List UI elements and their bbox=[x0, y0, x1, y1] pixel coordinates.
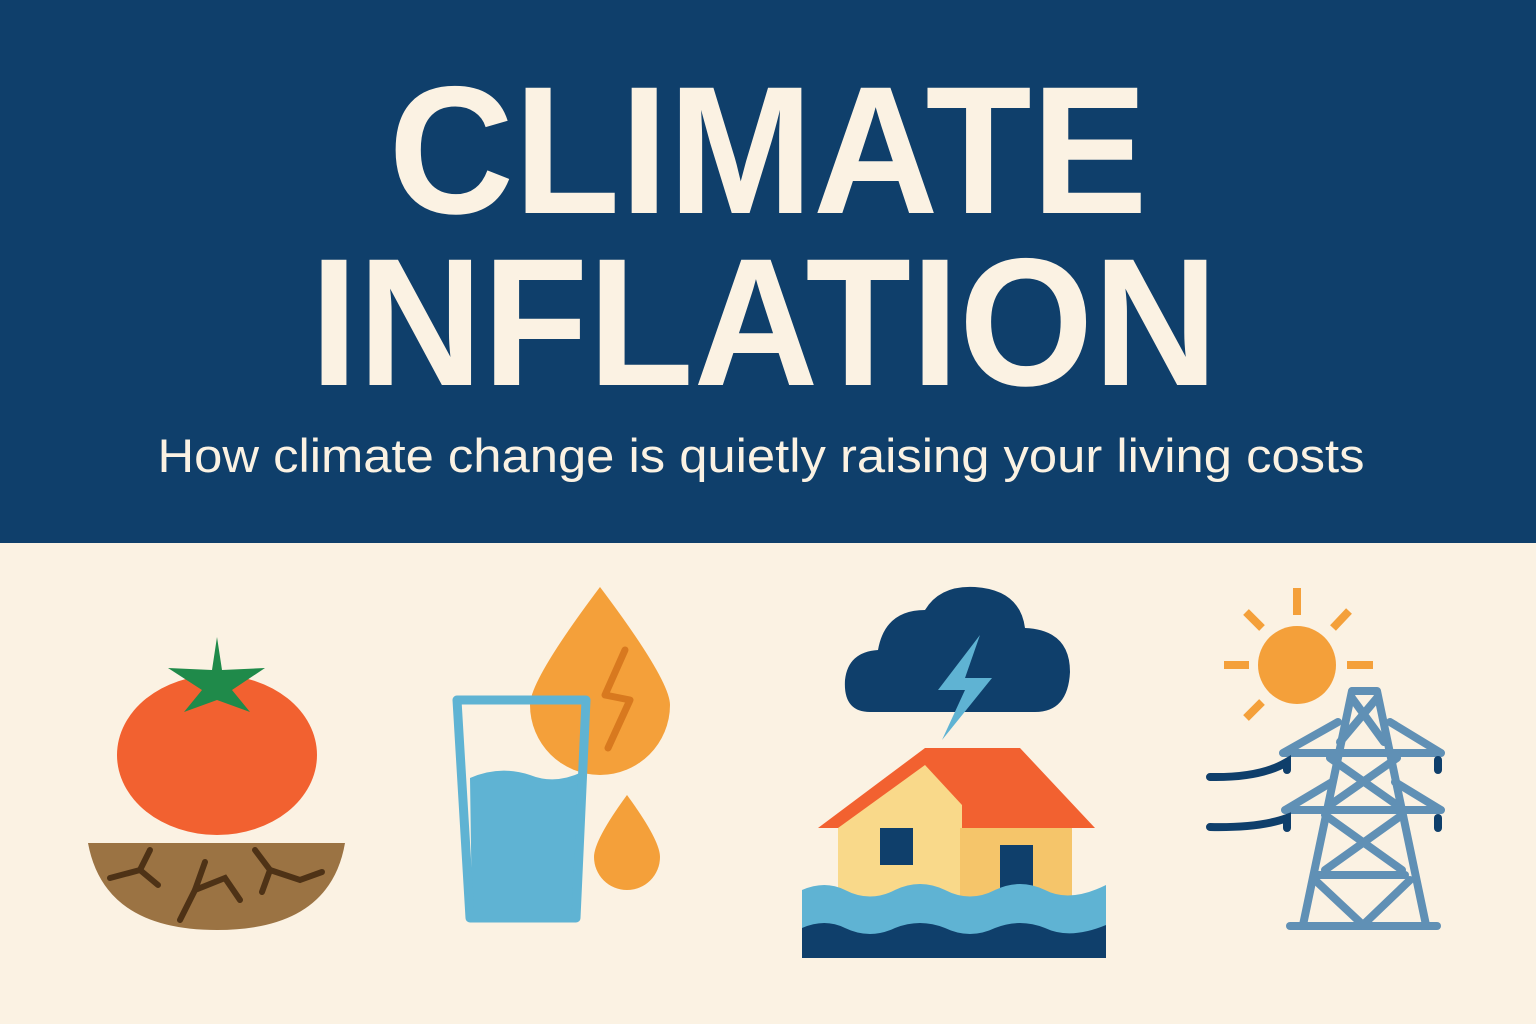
icon: sun and power tower bbox=[1210, 588, 1441, 926]
icon: flooded house under storm cloud bbox=[802, 587, 1106, 958]
title line 2: INFLATION bbox=[310, 220, 1218, 424]
icon: tomato on cracked soil bbox=[88, 637, 345, 930]
title line 1: CLIMATE bbox=[388, 48, 1148, 252]
subtitle: How climate change is quietly raising your living costs bbox=[158, 429, 1365, 482]
icon: glass of water with drops bbox=[457, 587, 670, 918]
header banner bbox=[0, 0, 1536, 543]
